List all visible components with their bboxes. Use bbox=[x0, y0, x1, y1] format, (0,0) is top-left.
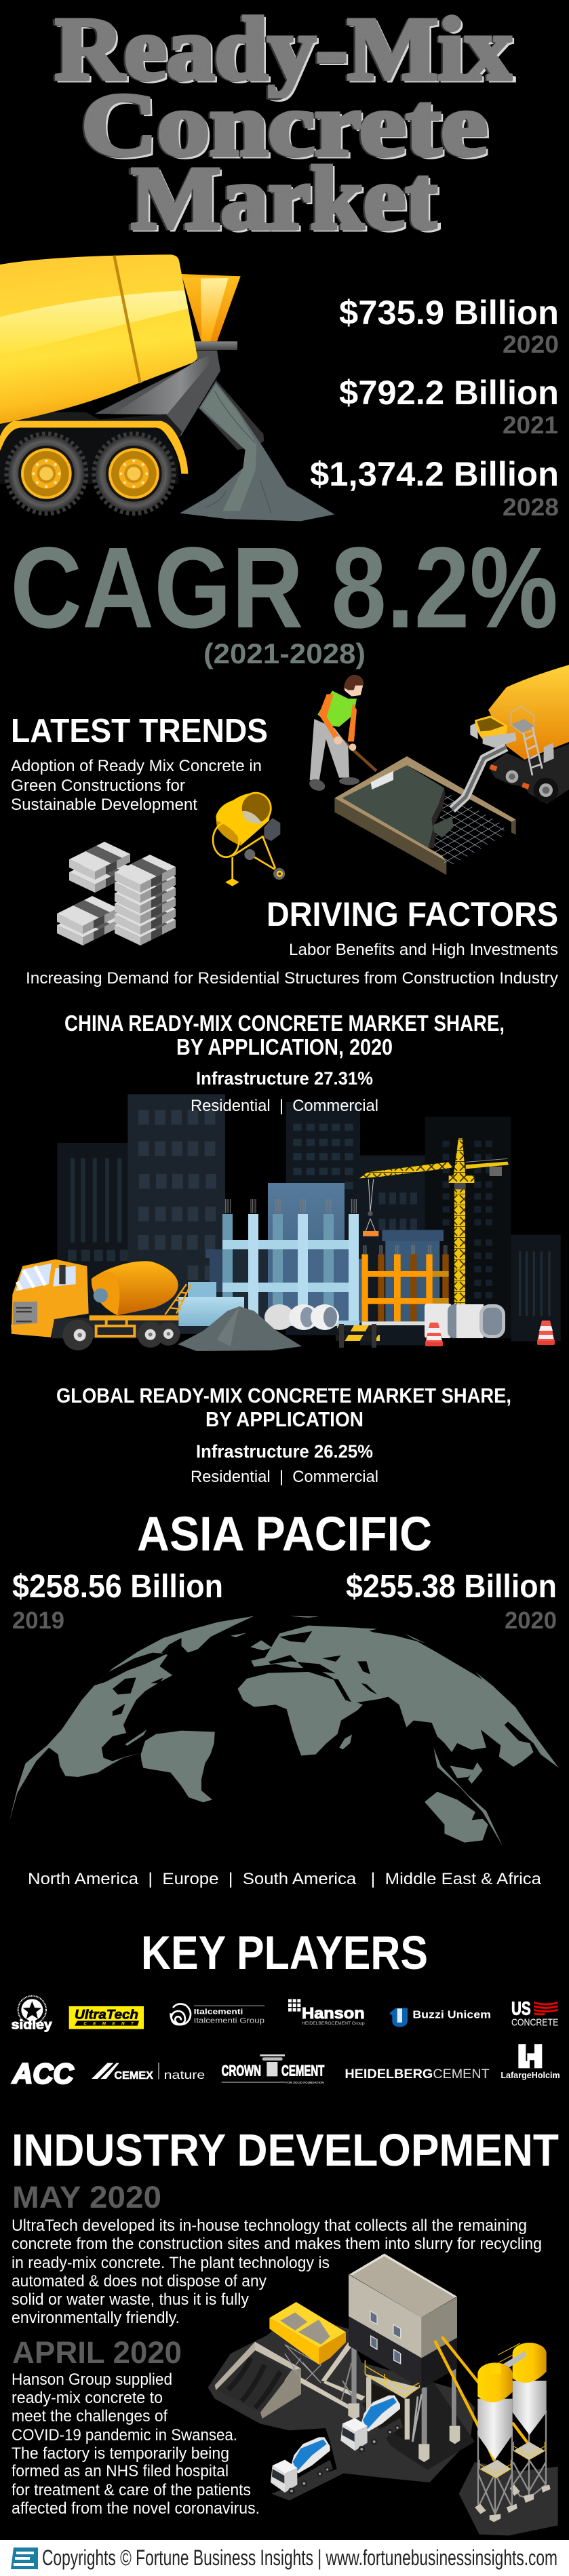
key player logos right bbox=[288, 1998, 560, 2082]
mixer truck front bbox=[271, 2437, 333, 2495]
traffic cones bbox=[425, 1321, 555, 1346]
drum bbox=[216, 793, 271, 846]
plant tower bbox=[349, 2254, 457, 2389]
orange frame structure bbox=[361, 1230, 449, 1325]
title line: Market: Market bbox=[133, 150, 439, 250]
April 2020 paragraph: COVID-19 pandemic in Swansea. bbox=[12, 2426, 237, 2444]
key player logos left bbox=[12, 1996, 325, 2090]
logo: Sidley bbox=[12, 1996, 52, 2033]
concrete chute bbox=[452, 747, 507, 809]
logo: Italcementi: Italcementi Group bbox=[194, 2017, 264, 2025]
logo: Buzzi Unicem: Buzzi Unicem bbox=[412, 2009, 491, 2021]
heading: Asia Pacific: ASIA PACIFIC bbox=[137, 1508, 432, 1561]
logo: Italcementi: Italcementi bbox=[194, 2008, 243, 2016]
North America bbox=[9, 1616, 254, 1822]
wet concrete bbox=[342, 765, 444, 848]
latest trends text: Sustainable Development bbox=[11, 796, 197, 814]
mixer drum bbox=[92, 1261, 178, 1315]
yellow feed pipes bbox=[435, 2338, 527, 2460]
worker bbox=[308, 675, 393, 793]
China market share heading: BY APPLICATION, 2020 bbox=[176, 1034, 393, 1059]
illustration: construction site city scene bbox=[11, 1094, 561, 1351]
latest trends text bbox=[11, 757, 262, 814]
concrete pour and pile bbox=[180, 382, 334, 521]
illustration: isometric concrete batching plant bbox=[208, 2254, 558, 2535]
China other segments: Residential | Commercial bbox=[191, 1097, 378, 1115]
driving factor 2: Increasing Demand for Residential Structures from Construction Industry bbox=[26, 969, 558, 988]
legs bbox=[310, 719, 349, 781]
year 2020: 2020 bbox=[503, 330, 559, 358]
right silo bbox=[498, 2343, 551, 2503]
driving factor 1: Labor Benefits and High Investments bbox=[289, 941, 558, 959]
May 2020 paragraph: solid or water waste, thus it is fully bbox=[12, 2290, 249, 2309]
chassis top bbox=[0, 412, 182, 439]
hook and load bbox=[366, 1179, 375, 1231]
truck ladder and control box bbox=[511, 707, 554, 775]
April 2020 paragraph: formed as an NHS filed hospital bbox=[12, 2462, 229, 2480]
value 2028: $1,374.2 Billion bbox=[310, 455, 559, 493]
Madagascar bbox=[339, 1734, 352, 1749]
sleeves bbox=[319, 694, 339, 739]
road barrier bbox=[336, 1324, 380, 1348]
logo: Crown Cement: CROWN bbox=[222, 2063, 261, 2080]
yellow hopper bbox=[269, 2302, 346, 2365]
mixer drum bbox=[0, 254, 197, 424]
Caribbean islands bbox=[125, 1730, 147, 1746]
bumper bbox=[11, 1322, 51, 1338]
drum highlight bbox=[0, 290, 188, 355]
world map globe bbox=[9, 1616, 559, 1846]
market value figures bbox=[310, 294, 559, 521]
wheels bbox=[244, 849, 255, 860]
ground shadows bbox=[208, 2313, 558, 2535]
May 2020 paragraph: UltraTech developed its in-house technology that collects all the remaining bbox=[12, 2217, 527, 2235]
global market share heading: BY APPLICATION bbox=[205, 1407, 364, 1431]
May 2020 paragraph: environmentally friendly. bbox=[12, 2309, 180, 2327]
wheel arch bbox=[0, 421, 188, 474]
logo: Cemex nature: nature bbox=[164, 2068, 205, 2082]
bag stack 1 bbox=[69, 842, 130, 893]
April 2020 paragraph: for treatment & care of the patients bbox=[12, 2481, 251, 2499]
heading: key players: KEY PLAYERS bbox=[141, 1926, 428, 1979]
logo: Hanson: Hanson bbox=[302, 2004, 365, 2022]
wire mesh bbox=[432, 792, 504, 867]
bag stack 2 bbox=[115, 855, 176, 945]
China infrastructure share: Infrastructure 27.31% bbox=[196, 1068, 373, 1089]
April 2020 paragraph bbox=[12, 2370, 260, 2518]
logo: US Concrete: CONCRETE bbox=[511, 2018, 559, 2029]
other regions list: North America | Europe | South America | Middle East & Africa bbox=[28, 1870, 542, 1888]
chassis bbox=[52, 1318, 178, 1338]
Greenland fragment bbox=[231, 1633, 247, 1637]
boots bbox=[308, 777, 327, 793]
logo: Crown Cement: CEMENT bbox=[281, 2063, 325, 2080]
year 2021: 2021 bbox=[503, 411, 558, 439]
logo: HeidelbergCement bbox=[345, 2067, 490, 2082]
Eurasia bbox=[250, 1626, 559, 1768]
light blue blocks bbox=[178, 1282, 359, 1326]
windshield bbox=[16, 1264, 52, 1291]
grey support frame bbox=[95, 351, 220, 436]
trowel tool bbox=[371, 771, 393, 789]
title line: Concrete: Concrete bbox=[79, 75, 486, 175]
logo: LafargeHolcim bbox=[501, 2044, 560, 2080]
conveyor and lattice bbox=[285, 2342, 365, 2409]
China market share heading bbox=[64, 1011, 505, 1059]
door window bbox=[53, 1266, 76, 1287]
truck wheels bbox=[490, 764, 558, 802]
May 2020 paragraph: in ready-mix concrete. The plant technology is bbox=[12, 2254, 330, 2272]
Australia bbox=[425, 1792, 488, 1843]
wheels bbox=[7, 434, 86, 513]
drum strap bbox=[114, 256, 140, 383]
global infrastructure share: Infrastructure 26.25% bbox=[196, 1441, 373, 1462]
logo: Crown Cement bbox=[222, 2054, 325, 2085]
cab bbox=[12, 1260, 89, 1338]
head bbox=[344, 675, 363, 697]
discharge bay bbox=[365, 2360, 422, 2442]
global market share heading: GLOBAL READY-MIX CONCRETE MARKET SHARE, bbox=[56, 1384, 511, 1407]
formwork bbox=[334, 756, 516, 875]
title line: Market: Market bbox=[129, 149, 435, 248]
logo: LafargeHolcim: LafargeHolcim bbox=[501, 2070, 560, 2080]
illustration: worker screeding concrete with truck bbox=[308, 665, 569, 875]
April 2020 paragraph: meet the challenges of bbox=[12, 2407, 168, 2425]
year 2019: 2019 bbox=[12, 1607, 64, 1634]
Southeast Asia islands bbox=[433, 1748, 503, 1846]
frame and stand bbox=[213, 823, 275, 882]
South America bbox=[141, 1731, 215, 1802]
steel pipe bbox=[195, 341, 237, 350]
tower crane bbox=[359, 1138, 509, 1304]
title bbox=[53, 0, 515, 250]
value 2020: $735.9 Billion bbox=[339, 294, 559, 332]
value 2019: $258.56 Billion bbox=[12, 1569, 223, 1605]
underbody bbox=[0, 428, 178, 484]
illustration: stacked cement bags bbox=[57, 842, 176, 945]
latest trends text: Green Constructions for bbox=[11, 777, 185, 795]
pouring hopper bbox=[470, 716, 517, 748]
title line: Ready-Mix: Ready-Mix bbox=[57, 1, 515, 100]
May 2020 paragraph: concrete from the construction sites and makes them into slurry for recycling bbox=[12, 2235, 542, 2253]
logo: HeidelbergCement: CEMENT bbox=[433, 2067, 490, 2082]
hopper bbox=[182, 274, 241, 341]
April 2020 paragraph: Hanson Group supplied bbox=[12, 2370, 172, 2389]
value 2021: $792.2 Billion bbox=[339, 374, 559, 412]
safety vest bbox=[317, 690, 357, 727]
heading: latest trends: LATEST TRENDS bbox=[11, 713, 268, 749]
logo: Hanson bbox=[288, 1999, 365, 2026]
tower windows bbox=[370, 2311, 401, 2364]
blue back building bbox=[268, 1183, 345, 1323]
crane mast bbox=[454, 1189, 465, 1304]
title line: Market: Market bbox=[131, 148, 437, 248]
tower feet bbox=[348, 2403, 460, 2462]
concrete pipes left bbox=[264, 1304, 339, 1330]
truck drum bbox=[488, 665, 569, 760]
May 2020 paragraph bbox=[12, 2217, 542, 2327]
title line: Ready-Mix: Ready-Mix bbox=[53, 0, 511, 99]
logo: ACC: ACC bbox=[12, 2058, 74, 2090]
May 2020 paragraph: automated & does not dispose of any bbox=[12, 2272, 267, 2290]
left silo bbox=[475, 2362, 517, 2522]
title line: Concrete: Concrete bbox=[83, 77, 490, 176]
illustration: portable concrete mixer bbox=[213, 792, 285, 886]
concrete pile bbox=[178, 1306, 302, 1351]
Africa bbox=[237, 1672, 363, 1755]
bag stack 3 bbox=[57, 896, 118, 945]
footer band bbox=[0, 2540, 569, 2576]
logo: UltraTech Cement bbox=[69, 2006, 144, 2029]
logo: Cemex nature: CEMEX bbox=[114, 2070, 154, 2082]
concrete pipes right bbox=[425, 1304, 505, 1338]
logo: UltraTech Cement: UltraTech bbox=[75, 2008, 138, 2023]
global market share heading bbox=[56, 1384, 511, 1431]
orange mixer truck bbox=[11, 1260, 191, 1350]
logo: UltraTech Cement: CEMENT bbox=[83, 2022, 134, 2026]
title line: Concrete: Concrete bbox=[81, 75, 488, 174]
motor box bbox=[264, 818, 280, 841]
logo: Hanson: HEIDELBERGCEMENT Group bbox=[302, 2021, 365, 2026]
title line: Ready-Mix: Ready-Mix bbox=[55, 0, 513, 98]
logo: US Concrete bbox=[511, 1998, 559, 2029]
latest trends text: Adoption of Ready Mix Concrete in bbox=[11, 757, 262, 775]
logo: HeidelbergCement: HEIDELBERG bbox=[345, 2067, 433, 2082]
year 2020: 2020 bbox=[505, 1607, 557, 1634]
year 2028: 2028 bbox=[503, 493, 559, 521]
drum hatch and ladder bbox=[94, 1284, 191, 1314]
logo: US Concrete: US bbox=[511, 1998, 531, 2019]
logo: Crown Cement: FOR SOLID FOUNDATION bbox=[286, 2081, 324, 2085]
CAGR period: (2021-2028) bbox=[203, 638, 366, 669]
global other segments: Residential | Commercial bbox=[191, 1468, 378, 1486]
grille bbox=[13, 1302, 37, 1329]
aggregate bay bbox=[215, 2342, 301, 2419]
logo: Sidley: sidley bbox=[12, 2018, 52, 2033]
drum mouth bbox=[240, 792, 272, 825]
April 2020 paragraph: affected from the novel coronavirus. bbox=[12, 2499, 260, 2518]
April 2020 heading: APRIL 2020 bbox=[12, 2335, 182, 2370]
illustration: yellow cement mixer truck pouring concrete bbox=[0, 254, 334, 521]
logo: Buzzi Unicem bbox=[389, 2008, 491, 2027]
April 2020 paragraph: ready-mix concrete to bbox=[12, 2389, 163, 2407]
column rebars bbox=[226, 1199, 356, 1213]
hands bbox=[334, 737, 342, 745]
background buildings left bbox=[57, 1094, 225, 1334]
concrete frame structure bbox=[222, 1199, 359, 1321]
mixer truck rear bbox=[340, 2396, 403, 2453]
truck chassis bbox=[488, 744, 569, 804]
Arctic islands bbox=[288, 1616, 495, 1687]
footer logo bbox=[11, 2548, 38, 2569]
chute bbox=[199, 380, 264, 450]
background buildings right bbox=[286, 1102, 561, 1345]
tower legs bbox=[351, 2347, 456, 2444]
crane jib bbox=[359, 1162, 452, 1178]
logo: Italcementi bbox=[171, 2004, 264, 2025]
April 2020 paragraph: The factory is temporarily being bbox=[12, 2444, 229, 2463]
value 2020: $255.38 Billion bbox=[346, 1569, 557, 1605]
May 2020 heading: MAY 2020 bbox=[12, 2180, 161, 2214]
logo: Cemex nature bbox=[92, 2063, 205, 2082]
wheels bbox=[62, 1320, 180, 1350]
